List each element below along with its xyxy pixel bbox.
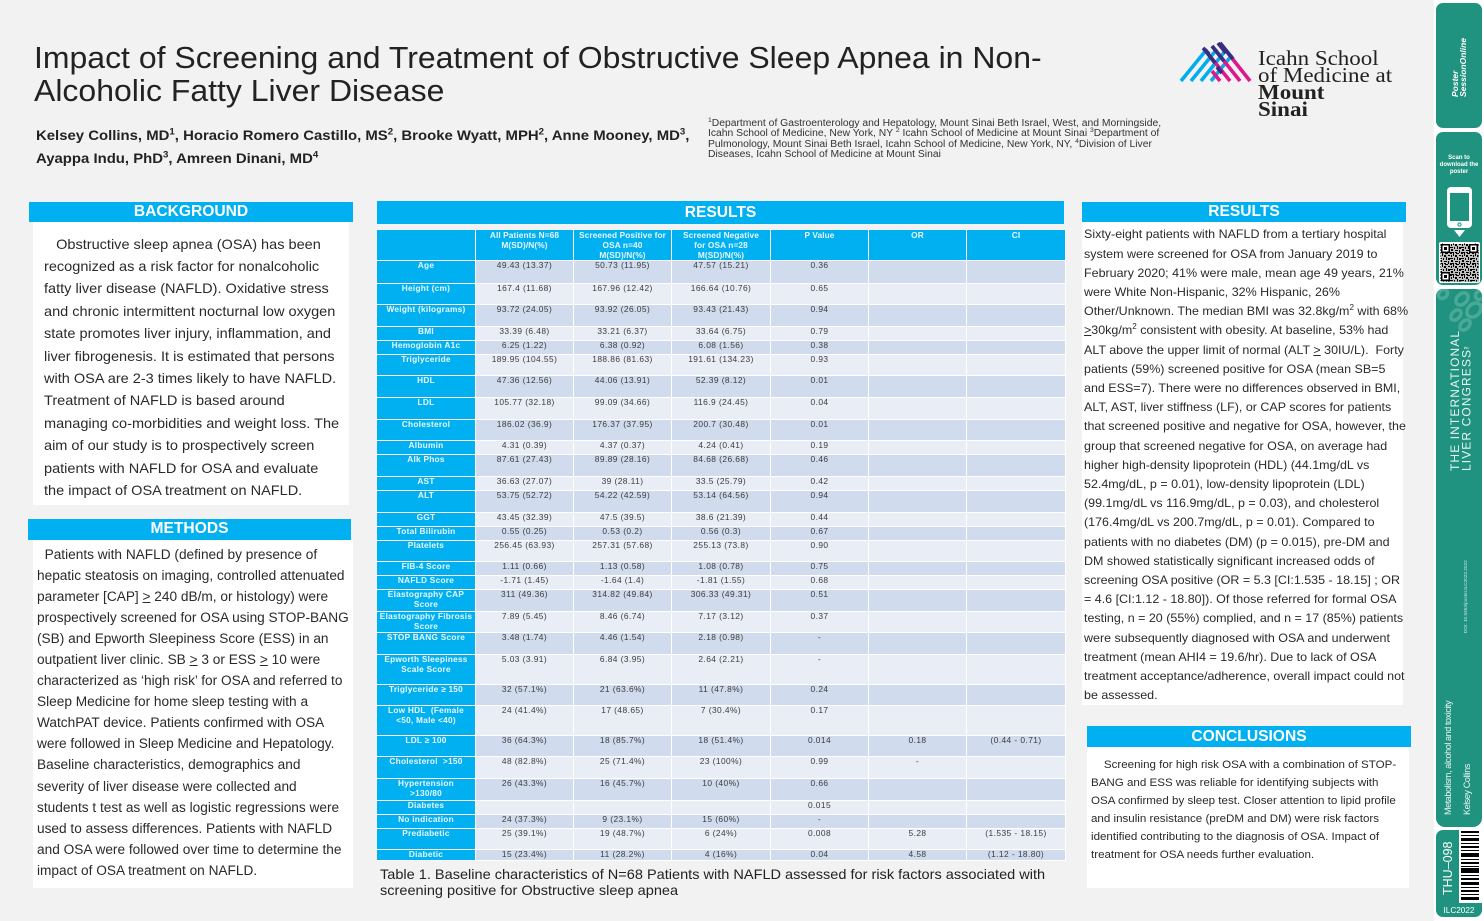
results narrative text: (176.4mg/dL vs 200.7mg/dL, p = 0.01). Compared to xyxy=(1084,515,1375,529)
affiliations: Pulmonology, Mount Sinai Beth Israel, Icahn School of Medicine, New York, NY, 4Division of Liver xyxy=(708,137,1152,150)
authors: Kelsey Collins, MD1, Horacio Romero Castillo, MS2, Brooke Wyatt, MPH2, Anne Mooney, MD3, xyxy=(36,126,689,143)
results narrative text: testing, n = 20 (55%) complied, and n = 17 (85%) patients xyxy=(1084,611,1403,625)
results narrative text: were subsequently diagnosed with OSA and underwent xyxy=(1084,631,1390,645)
conclusions text xyxy=(1091,759,1396,861)
results narrative text: February 2020; 41% were male, mean age 49 years, 21% xyxy=(1084,266,1404,280)
DOI: DOI: 10.5353/poster.ILC2022.2022 xyxy=(1463,560,1468,633)
track and presenter: Metabolism, alcohol and toxicity xyxy=(1443,701,1453,815)
background text: fatty liver disease (NAFLD). Oxidative stress xyxy=(44,280,329,296)
background text: with OSA are 2-3 times likely to have NAFLD. xyxy=(44,370,336,386)
logo wordmark: Mount xyxy=(1258,80,1324,104)
methods text: were followed in Sleep Medicine and Hepatology. xyxy=(37,736,334,751)
methods body xyxy=(33,540,353,888)
results narrative text: be assessed. xyxy=(1084,688,1158,702)
hexagon pattern xyxy=(1436,289,1482,332)
conclusions text: BANG and ESS was reliable for identifying subjects with xyxy=(1091,777,1378,789)
background text: and chronic intermittent nocturnal low oxygen xyxy=(44,303,335,319)
methods text: Sleep Medicine for home sleep testing with a xyxy=(37,694,308,709)
results narrative text: that screened positive and negative for OSA, however, the xyxy=(1084,419,1406,433)
conclusions text: treatment for OSA needs further evaluation. xyxy=(1091,849,1314,861)
affiliations: 1Department of Gastroenterology and Hepatology, Mount Sinai Beth Israel, West, and Morningside, xyxy=(708,116,1161,128)
panel: background xyxy=(29,202,353,505)
authors: Ayappa Indu, PhD3, Amreen Dinani, MD4 xyxy=(36,149,318,166)
table: baseline characteristics: Score xyxy=(414,598,438,608)
results narrative text: DM showed statistically significant increased odds of xyxy=(1084,554,1375,568)
background text: liver fibrogenesis. It is estimated that persons xyxy=(44,348,335,364)
results narrative text xyxy=(1084,227,1408,702)
background text: recognized as a risk factor for nonalcoholic xyxy=(44,258,319,274)
sidebar: the international liver congress xyxy=(1436,289,1482,827)
conclusions heading: CONCLUSIONS xyxy=(1191,728,1307,745)
scan text xyxy=(1440,154,1478,175)
table caption: Table 1. Baseline characteristics of N=68 Patients with NAFLD assessed for risk factors associated with xyxy=(380,867,1045,882)
methods heading: METHODS xyxy=(151,520,228,537)
results narrative body xyxy=(1082,222,1403,705)
results narrative text: were White Non-Hispanic, 32% Hispanic, 26% xyxy=(1084,285,1340,299)
poster session online wordmark xyxy=(1450,38,1468,97)
title xyxy=(34,41,1042,108)
conclusions text: and insulin resistance (preDM and DM) were risk factors xyxy=(1091,813,1379,825)
sidebar: poster session online badge xyxy=(1436,3,1482,128)
title: Impact of Screening and Treatment of Obstructive Sleep Apnea in Non- xyxy=(34,41,1042,75)
results narrative text: = 4.6 [CI:1.12 - 18.80]). Of those referred for formal OSA xyxy=(1084,592,1396,606)
results narrative text: ALT above the upper limit of normal (ALT > 30IU/L). Forty xyxy=(1084,343,1404,357)
logo wordmark xyxy=(1258,46,1392,121)
table: baseline characteristics: CI xyxy=(1012,230,1020,240)
results narrative text: system were screened for OSA from January 2019 to xyxy=(1084,246,1377,260)
table: baseline characteristics: Score xyxy=(414,620,438,630)
background text: Treatment of NAFLD is based around xyxy=(44,392,285,408)
scan text: poster xyxy=(1450,169,1468,175)
background text xyxy=(44,236,339,498)
results narrative text: and ESS=7). There were no differences observed in BMI, xyxy=(1084,381,1400,395)
table: baseline characteristics: OSA n=40 xyxy=(603,240,642,250)
results narrative text: ALT, AST, liver stiffness (LF), or CAP scores for patients xyxy=(1084,400,1391,414)
background heading: BACKGROUND xyxy=(134,203,248,220)
poster session online wordmark: Poster xyxy=(1450,71,1460,97)
background text: state promotes liver injury, inflammation, and xyxy=(44,325,331,341)
methods text: used to assess differences. Patients with NAFLD xyxy=(37,821,332,836)
panel: methods xyxy=(28,519,353,888)
methods text: severity of liver disease were collected and xyxy=(37,779,297,794)
poster session online wordmark: SessionOnline xyxy=(1458,38,1468,97)
results narrative text: (99.1mg/dL vs 116.9mg/dL, p = 0.03), and cholesterol xyxy=(1084,496,1379,510)
background text: the impact of OSA treatment on NAFLD. xyxy=(44,482,302,498)
conclusions heading xyxy=(1087,726,1411,747)
title: Alcoholic Fatty Liver Disease xyxy=(34,74,444,108)
results narrative text: patients (59%) screened positive for OSA (mean SB=5 xyxy=(1084,362,1385,376)
methods text: Patients with NAFLD (defined by presence of xyxy=(45,546,317,562)
methods text: Baseline characteristics, demographics and xyxy=(37,757,300,772)
table: baseline characteristics: P Value xyxy=(804,230,835,240)
logo: Icahn School of Medicine at Mount Sinai xyxy=(1180,42,1392,121)
conclusions text: Screening for high risk OSA with a combination of STOP- xyxy=(1104,759,1396,771)
table: baseline characteristics: Screened Positive for xyxy=(579,230,666,240)
table caption xyxy=(380,867,1045,898)
background text: managing co-morbidities and weight loss. The xyxy=(44,415,339,431)
poster number: THU–098 xyxy=(1441,842,1455,895)
sidebar xyxy=(1434,0,1484,921)
table: baseline characteristics: for OSA n=28 xyxy=(694,240,748,250)
results narrative text: group that screened negative for OSA, on average had xyxy=(1084,439,1387,453)
sidebar: scan to download xyxy=(1436,132,1482,285)
icon: Mount Sinai mountain mark xyxy=(1180,42,1252,82)
table caption: screening positive for Obstructive sleep apnea xyxy=(380,882,678,898)
methods text xyxy=(37,546,349,878)
table: baseline characteristics: >130/80 xyxy=(410,788,442,798)
table: baseline characteristics: Scale Score xyxy=(401,664,451,674)
table: baseline characteristics: All Patients N=68 xyxy=(490,230,559,240)
table: baseline characteristics: <50, Male <40) xyxy=(396,714,456,724)
scan text: download the xyxy=(1440,162,1478,168)
methods text: (SB) and Epworth Sleepiness Score (ESS) in an xyxy=(37,631,329,646)
results narrative text: treatment acceptance/adherence, overall impact could not xyxy=(1084,669,1405,683)
results narrative text: Sixty-eight patients with NAFLD from a tertiary hospital xyxy=(1084,227,1386,241)
methods text: and OSA were followed over time to determine the xyxy=(37,842,341,857)
background text: aim of our study is to prospectively screen xyxy=(44,437,314,453)
methods heading xyxy=(28,519,351,540)
conclusions body xyxy=(1087,747,1409,888)
barcode xyxy=(1459,830,1482,903)
background text: Obstructive sleep apnea (OSA) has been xyxy=(56,236,321,252)
methods text: WatchPAT device. Patients confirmed with OSA xyxy=(37,715,324,730)
methods text: parameter [CAP] > 240 dB/m, or histology) were xyxy=(37,589,328,604)
methods text: students t test as well as logistic regressions were xyxy=(37,800,339,815)
congress name: LIVER CONGRESS™ xyxy=(1460,342,1474,471)
table: baseline characteristics: Screened Negative xyxy=(683,230,759,240)
conclusions text: OSA confirmed by sleep test. Closer attention to lipid profile xyxy=(1091,795,1396,807)
table: baseline characteristics: M(SD)/N(%) xyxy=(698,250,744,260)
results narrative text: 52.4mg/dL, p = 0.01), low-density lipoprotein (LDL) xyxy=(1084,477,1365,491)
methods text: prospectively screened for OSA using STOP-BANG xyxy=(37,610,349,625)
results narrative text: screening OSA positive (OR = 5.3 [CI:1.535 - 18.15] ; OR xyxy=(1084,573,1400,587)
affiliations xyxy=(708,116,1161,160)
background heading xyxy=(29,202,353,222)
logo wordmark: Icahn School xyxy=(1258,46,1379,70)
track and presenter: Kelsey Collins xyxy=(1462,764,1472,815)
results narrative heading: RESULTS xyxy=(1208,203,1280,220)
conclusions text: identified contributing to the diagnosis of OSA. Impact of xyxy=(1091,831,1379,843)
congress name: THE INTERNATIONAL xyxy=(1448,330,1462,471)
methods text: impact of OSA treatment on NAFLD. xyxy=(37,863,257,878)
sidebar: poster number and barcode xyxy=(1436,830,1482,917)
results narrative text: Other/Unknown. The median BMI was 32.8kg/m2 with 68% xyxy=(1084,303,1408,318)
affiliations: Icahn School of Medicine, New York, NY 2 Icahn School of Medicine at Mount Sinai 3Department of xyxy=(708,127,1159,139)
results heading: RESULTS xyxy=(685,204,756,221)
table: baseline characteristics xyxy=(377,230,1066,861)
logo wordmark: Sinai xyxy=(1258,97,1308,121)
icon: phone xyxy=(1447,187,1472,237)
panel: conclusions xyxy=(1087,726,1411,888)
results narrative text: >30kg/m2 consistent with obesity. At baseline, 53% had xyxy=(1084,322,1388,337)
authors xyxy=(36,126,689,166)
table: baseline characteristics: M(SD)/N(%) xyxy=(501,240,548,250)
track and presenter xyxy=(1443,700,1472,815)
panel: results narrative xyxy=(1082,202,1408,705)
methods text: outpatient liver clinic. SB > 3 or ESS > 10 were xyxy=(37,652,320,667)
results narrative text: higher high-density lipoprotein (HDL) (44.1mg/dL vs xyxy=(1084,458,1369,472)
results narrative text: treatment (mean AHI4 = 19.6/hr). Due to lack of OSA xyxy=(1084,650,1376,664)
table: baseline characteristics: OR xyxy=(911,230,924,240)
affiliations: Diseases, Icahn School of Medicine at Mount Sinai xyxy=(708,149,941,160)
results narrative text: patients with no diabetes (DM) (p = 0.015), pre-DM and xyxy=(1084,535,1390,549)
congress code: ILC2022 xyxy=(1444,906,1474,915)
table: baseline characteristics: M(SD)/N(%) xyxy=(599,250,646,260)
methods text: characterized as ‘high risk’ for OSA and referred to xyxy=(37,673,342,688)
congress name xyxy=(1448,330,1474,471)
logo wordmark: of Medicine at xyxy=(1258,63,1392,87)
methods text: hepatic steatosis on imaging, controlled attenuated xyxy=(37,568,345,583)
background body xyxy=(33,222,349,505)
results narrative heading xyxy=(1082,202,1406,222)
results heading xyxy=(377,201,1064,224)
background text: patients with NAFLD for OSA and evaluate xyxy=(44,460,318,476)
scan text: Scan to xyxy=(1448,155,1470,161)
QR code xyxy=(1439,242,1480,283)
